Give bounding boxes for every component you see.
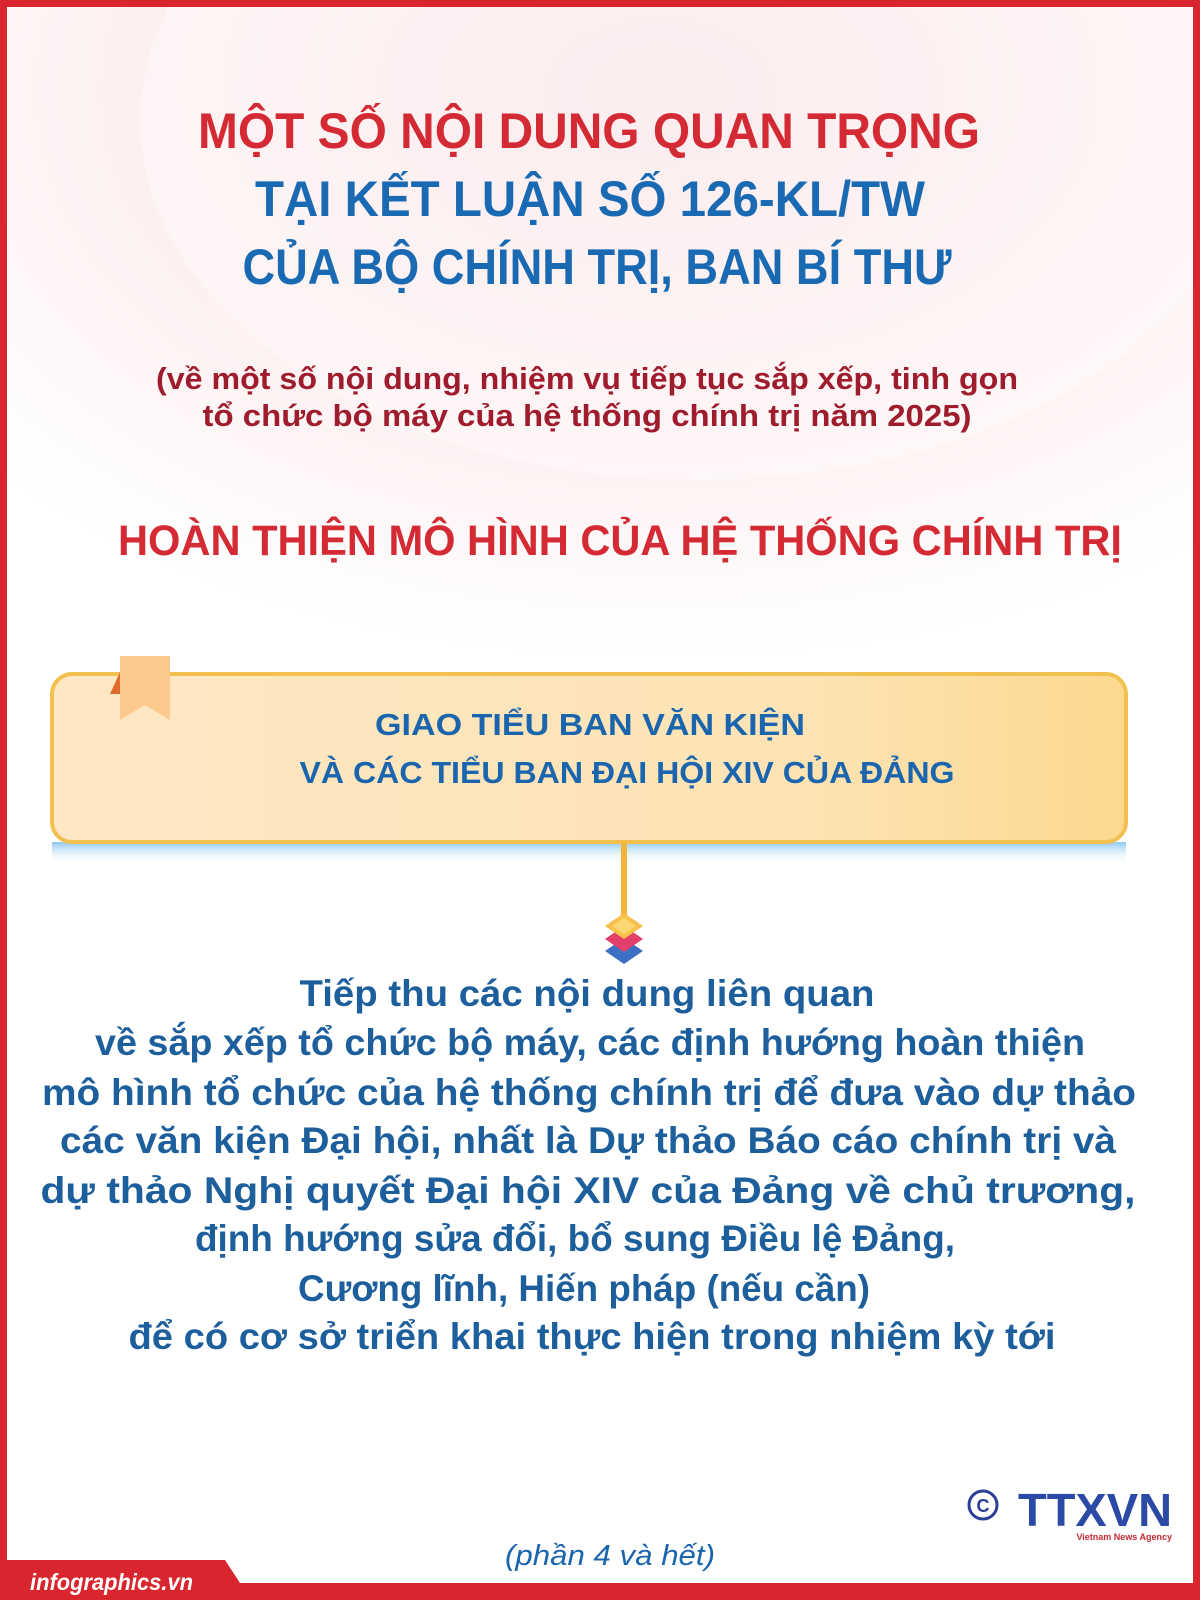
- body text: dự thảo Nghị quyết Đại hội XIV của Đảng về chủ trương,: [40, 1170, 1136, 1211]
- title: CỦA BỘ CHÍNH TRỊ, BAN BÍ THƯ: [242, 238, 952, 295]
- connector line: [621, 842, 627, 920]
- body text: Tiếp thu các nội dung liên quan: [300, 973, 874, 1014]
- icon: bookmark ribbon: [110, 656, 170, 720]
- body text: về sắp xếp tổ chức bộ máy, các định hướng hoàn thiện: [95, 1021, 1085, 1063]
- footer tab: infographics.vn: infographics.vn: [30, 1569, 193, 1595]
- subtitle: [156, 360, 1018, 433]
- icon: stacked diamonds: [605, 913, 643, 964]
- body text: mô hình tổ chức của hệ thống chính trị để đưa vào dự thảo: [42, 1072, 1136, 1113]
- banner box: VÀ CÁC TIỂU BAN ĐẠI HỘI XIV CỦA ĐẢNG: [300, 754, 955, 790]
- section heading: HOÀN THIỆN MÔ HÌNH CỦA HỆ THỐNG CHÍNH TRỊ: [118, 516, 1122, 565]
- footer tab: infographics.vn: [0, 1560, 1200, 1600]
- body text: các văn kiện Đại hội, nhất là Dự thảo Báo cáo chính trị và: [60, 1120, 1116, 1161]
- logo: TTXVN: [969, 1484, 1172, 1542]
- banner box: [52, 656, 1126, 864]
- title: MỘT SỐ NỘI DUNG QUAN TRỌNG: [198, 102, 980, 159]
- body text: để có cơ sở triển khai thực hiện trong nhiệm kỳ tới: [128, 1316, 1056, 1357]
- subtitle: (về một số nội dung, nhiệm vụ tiếp tục sắp xếp, tinh gọn: [156, 360, 1018, 396]
- title: TẠI KẾT LUẬN SỐ 126-KL/TW: [255, 170, 926, 227]
- logo: TTXVN: Vietnam News Agency: [1076, 1532, 1172, 1542]
- footer note: (phần 4 và hết): [505, 1540, 715, 1572]
- logo: TTXVN: C: [976, 1496, 990, 1516]
- subtitle: tổ chức bộ máy của hệ thống chính trị năm 2025): [202, 398, 972, 433]
- title: [198, 102, 980, 295]
- body text: định hướng sửa đổi, bổ sung Điều lệ Đảng,: [195, 1218, 955, 1259]
- banner box: GIAO TIỂU BAN VĂN KIỆN: [375, 706, 805, 742]
- body text: Cương lĩnh, Hiến pháp (nếu cần): [298, 1268, 870, 1309]
- logo: TTXVN: TTXVN: [1018, 1484, 1172, 1536]
- body text: [40, 973, 1136, 1357]
